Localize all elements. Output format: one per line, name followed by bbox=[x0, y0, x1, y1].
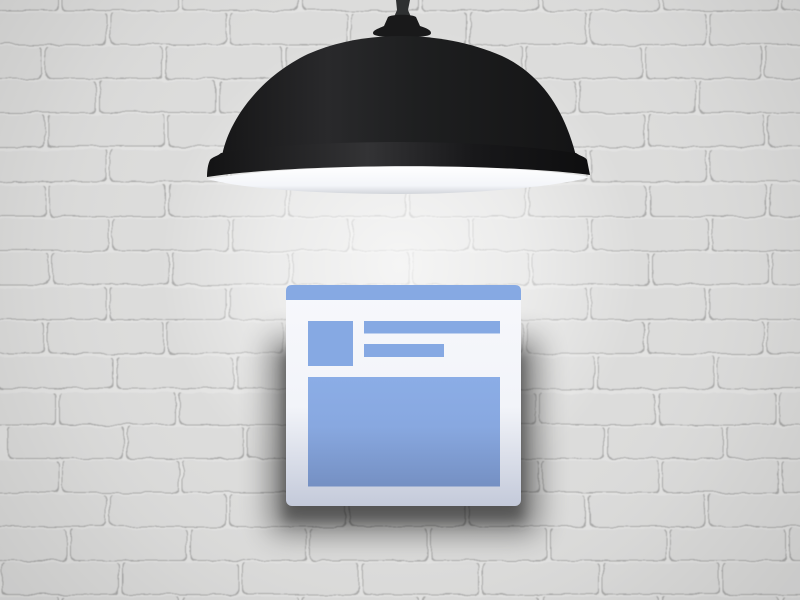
card drop shadow bbox=[270, 338, 538, 533]
lamp bbox=[207, 0, 590, 194]
lamp dome bbox=[222, 36, 576, 156]
lamp inner light bbox=[207, 166, 590, 194]
image placeholder bbox=[308, 321, 353, 366]
lamp rim band bbox=[207, 142, 590, 177]
subtitle line bbox=[364, 344, 444, 357]
card header bar bbox=[286, 285, 521, 300]
card body bbox=[286, 285, 521, 506]
card bbox=[286, 285, 521, 506]
title line bbox=[364, 321, 500, 334]
lamp stem and collar bbox=[373, 0, 431, 37]
main content block bbox=[308, 377, 500, 486]
